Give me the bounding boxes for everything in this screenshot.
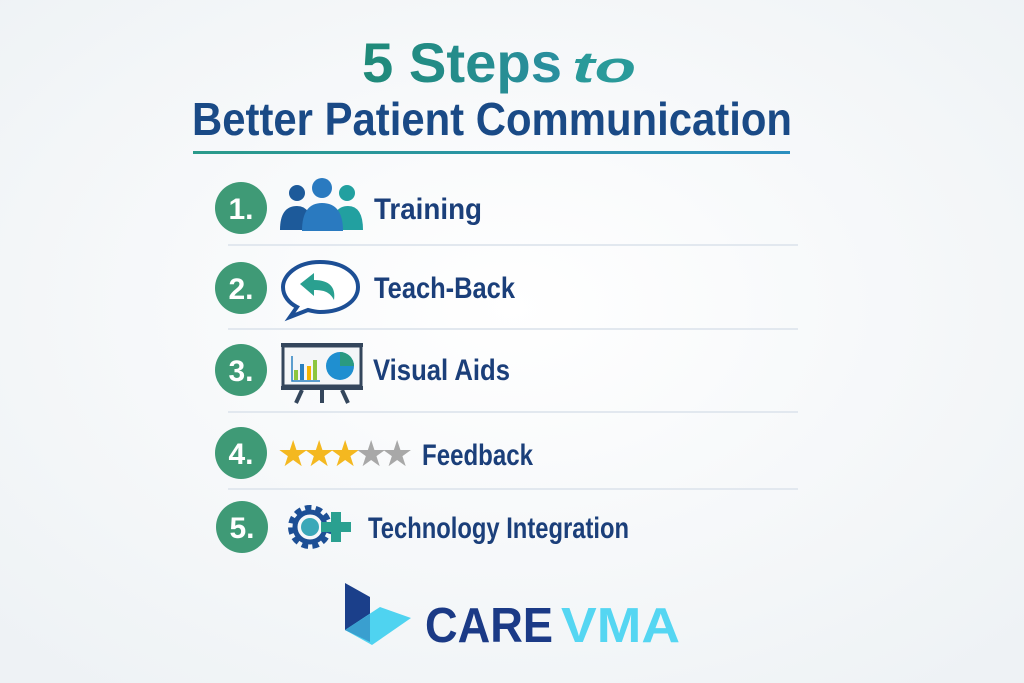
step 4: Feedback: Feedback <box>422 439 533 472</box>
logo: Care VMA: VMA <box>561 599 680 653</box>
icon: speech bubble with arrow <box>283 262 358 317</box>
step 3: Visual Aids: Visual Aids <box>373 354 510 387</box>
step 2: Teach-Back <box>215 262 515 317</box>
step 1: Training: 1. <box>228 193 254 226</box>
title: Better Patient Communication <box>192 93 792 145</box>
title <box>192 31 792 154</box>
step 1: Training: Training <box>374 193 482 226</box>
icon: stars rating: ★ <box>355 434 387 475</box>
title: to <box>572 43 636 92</box>
icon: people <box>280 178 363 231</box>
title: 5 Steps <box>362 31 562 94</box>
icon: logo mark <box>345 583 411 645</box>
dividers <box>228 245 798 489</box>
step 4: Feedback: 4. <box>228 438 254 471</box>
step 1: Training <box>215 178 482 234</box>
icon: stars rating <box>277 434 413 475</box>
step 4: Feedback <box>215 427 533 479</box>
icon: stars rating: ★ <box>303 434 335 475</box>
step 3: Visual Aids: 3. <box>228 355 254 388</box>
icon: gear with plus <box>292 509 351 545</box>
icon: presentation board <box>281 343 363 403</box>
step 2: Teach-Back: Teach-Back <box>374 272 515 305</box>
icon: stars rating: ★ <box>277 434 309 475</box>
step 5: Technology Integration: 5. <box>229 512 255 545</box>
logo: Care VMA <box>345 583 680 653</box>
step 5: Technology Integration <box>216 501 629 553</box>
step 5: Technology Integration: Technology Integration <box>368 512 629 545</box>
icon: stars rating: ★ <box>381 434 413 475</box>
icon: stars rating: ★ <box>329 434 361 475</box>
step 3: Visual Aids <box>215 343 510 403</box>
step 2: Teach-Back: 2. <box>228 273 254 306</box>
logo: Care VMA: CARE <box>425 599 553 653</box>
